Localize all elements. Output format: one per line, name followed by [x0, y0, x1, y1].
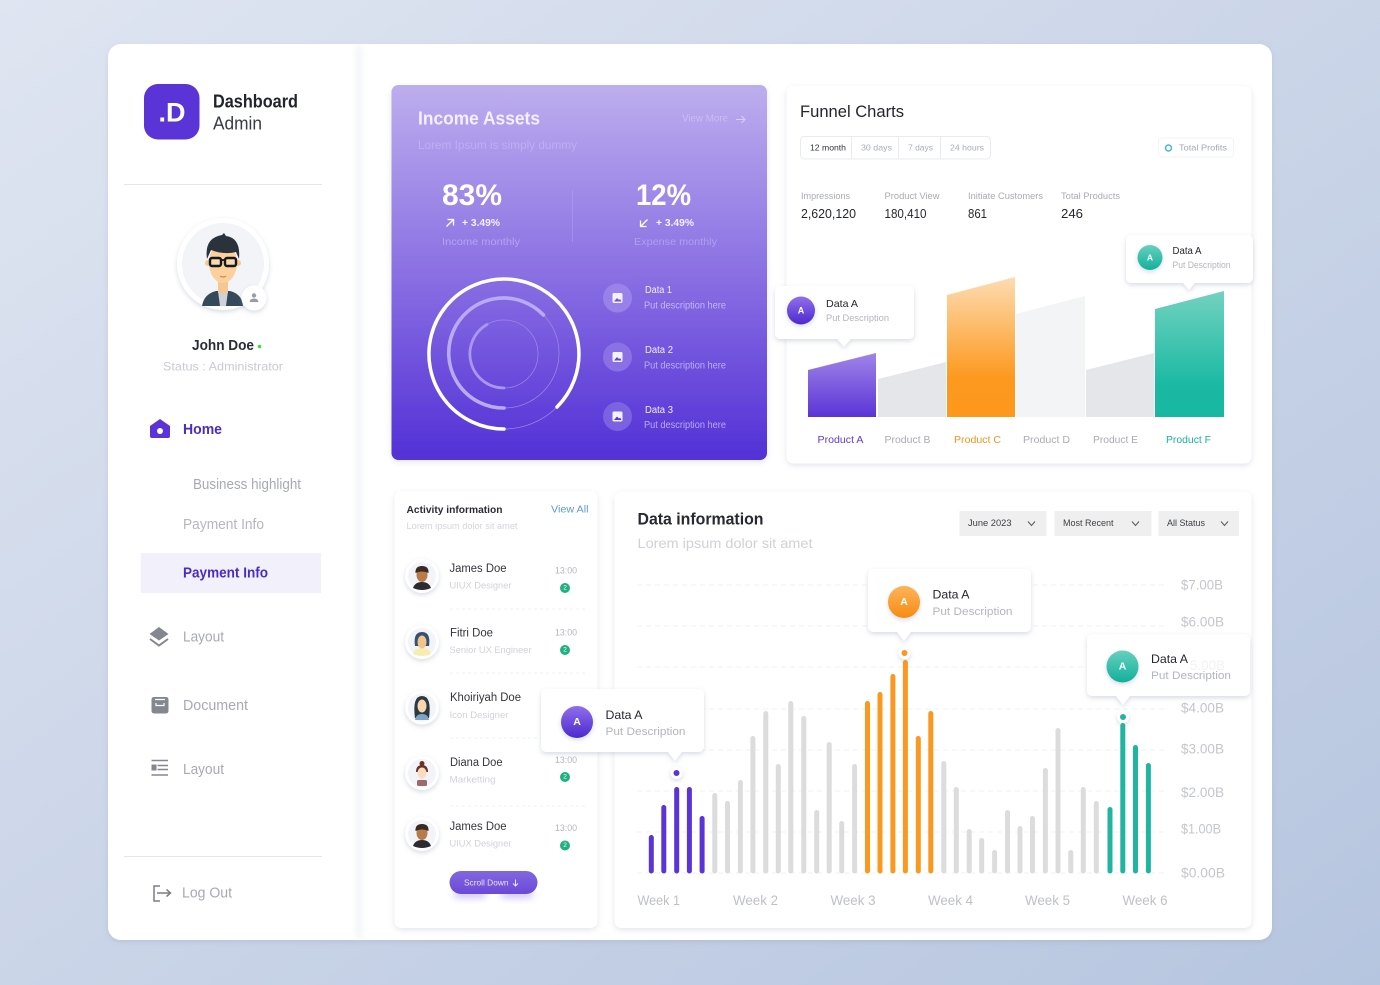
panel: funnel charts: [775, 86, 1253, 464]
log out: [154, 886, 232, 902]
range tabs: 24 hours: [950, 142, 984, 152]
dropdown: status: [1158, 511, 1239, 536]
legend: data 1: [603, 284, 726, 312]
legend: data 1: Put description here: [644, 300, 726, 312]
bars: gray group one: [715, 704, 855, 871]
nav: layout: [150, 627, 224, 646]
brand name: Admin: [213, 114, 262, 134]
bars: gray group two: [944, 730, 1096, 871]
week labels: Week 4: [928, 892, 973, 908]
chart tooltip: teal: Put Description: [1151, 670, 1231, 682]
chart tooltip: purple: Data A: [606, 708, 642, 722]
radial chart: [429, 279, 579, 429]
range tabs: 12 month: [810, 142, 846, 152]
stat: product view: [884, 191, 940, 221]
nav: document: Document: [183, 698, 248, 714]
chart tooltip: teal: A: [1119, 660, 1127, 672]
stat: initiate customers: 861: [968, 206, 987, 221]
stat: income monthly: + 3.49%: [462, 217, 501, 229]
logo: [144, 84, 200, 140]
week labels: Week 3: [830, 892, 876, 908]
nav: payment info active: Payment Info: [183, 566, 268, 582]
nav: payment info: Payment Info: [183, 517, 264, 533]
stat: income monthly: 83%: [442, 179, 502, 212]
y axis labels: $0.00B: [1181, 864, 1225, 880]
y axis labels: $1.00B: [1181, 820, 1221, 836]
total profits legend: [1158, 138, 1234, 157]
week labels: [638, 892, 1168, 908]
user name: John Doe: [192, 338, 254, 354]
stat: impressions: 2,620,120: [801, 206, 856, 221]
bars: teal group: [1110, 726, 1148, 871]
funnel tooltip: teal: A: [1147, 252, 1153, 262]
range tabs: 30 days: [861, 142, 892, 152]
chart tooltip: purple: [541, 689, 704, 761]
sidebar: [124, 46, 362, 938]
bar chart: [651, 662, 1148, 871]
legend: data 2: Data 2: [645, 345, 673, 356]
view more link: View More: [682, 114, 728, 124]
activity row: Diana Doe: [405, 755, 577, 790]
activity row: Fitri Doe: [405, 625, 577, 659]
activity row: James Doe 2: UIUX Designer: [450, 838, 512, 850]
legend: data 2: [603, 342, 726, 372]
dropdown: month: June 2023: [968, 518, 1012, 529]
chart tooltip: orange: [868, 569, 1031, 641]
product labels: Product B: [884, 434, 930, 446]
stat: total products: 246: [1061, 206, 1083, 221]
brand name: [213, 92, 298, 134]
range tabs: 7 days: [908, 142, 933, 152]
activity row: Diana Doe: Marketting: [450, 774, 496, 786]
dropdown: status: All Status: [1167, 518, 1205, 529]
nav: home: Home: [183, 422, 222, 438]
stat: expense monthly: [634, 179, 718, 248]
product labels: [818, 434, 1211, 446]
view all link: View All: [551, 504, 588, 516]
scroll down button: [450, 871, 538, 897]
legend: data 3: Data 3: [645, 405, 673, 416]
nav: layout 2: [152, 760, 224, 778]
scroll down button: Scroll Down: [464, 878, 509, 888]
activity row: Fitri Doe: 13:00: [555, 628, 577, 638]
chart tooltip: teal: Data A: [1151, 652, 1188, 666]
funnel tooltip: teal: Data A: [1172, 246, 1202, 257]
y axis labels: $6.00B: [1181, 614, 1224, 630]
panel: income assets: [392, 85, 767, 460]
brand name: Dashboard: [213, 92, 298, 112]
total profits legend: Total Profits: [1179, 142, 1227, 152]
nav: document: [152, 697, 248, 714]
chart tooltip: purple: Put Description: [606, 726, 686, 738]
week labels: Week 1: [638, 892, 680, 908]
y axis labels: [1181, 576, 1225, 880]
activity heading: Lorem ipsum dolor sit amet: [406, 521, 518, 531]
activity row: Khoiriyah Doe: Icon Designer: [450, 710, 508, 721]
product labels: Product A: [818, 434, 864, 446]
activity row: Khoiriyah Doe: 13:00: [555, 690, 577, 700]
stat: product view: Product View: [884, 191, 940, 201]
funnel tooltip: purple: Put Description: [826, 313, 889, 324]
activity row: Diana Doe: Diana Doe: [450, 757, 502, 769]
range tabs: [800, 136, 990, 159]
product labels: Product F: [1166, 434, 1211, 446]
stat: expense monthly: Expense monthly: [634, 236, 718, 248]
nav: payment info active: [141, 553, 321, 593]
marker: purple: [670, 767, 682, 779]
bars: purple group: [651, 790, 702, 871]
week labels: Week 6: [1122, 892, 1168, 908]
chart tooltip: purple: A: [573, 716, 581, 728]
activity row: Fitri Doe: Senior UX Engineer: [450, 645, 532, 656]
activity row: James Doe 2: [405, 817, 577, 851]
stat: total products: [1061, 191, 1121, 221]
activity row: Diana Doe: 2: [563, 774, 567, 780]
data heading: Lorem ipsum dolor sit amet: [638, 535, 813, 551]
funnel chart: [808, 277, 1224, 417]
stat: income monthly: Income monthly: [442, 236, 521, 248]
y axis labels: $2.00B: [1181, 784, 1224, 800]
product labels: Product E: [1093, 434, 1138, 446]
activity row: Fitri Doe: Fitri Doe: [450, 628, 493, 640]
nav: layout: Layout: [183, 630, 224, 646]
data heading: Data information: [638, 510, 764, 528]
activity row: James Doe 2: James Doe: [450, 821, 506, 833]
stat: expense monthly: 12%: [636, 179, 691, 212]
chart tooltip: teal: [1087, 634, 1250, 705]
activity heading: Activity information: [406, 504, 502, 516]
nav: home: [150, 419, 222, 438]
panel: data information: [541, 492, 1252, 928]
legend: data 2: Put description here: [644, 360, 726, 372]
stat: initiate customers: Initiate Customers: [968, 191, 1044, 201]
stat: income monthly: [442, 179, 521, 248]
user status: Status : Administrator: [163, 360, 283, 374]
legend: data 3: Put description here: [644, 420, 726, 431]
funnel title: Funnel Charts: [800, 102, 904, 121]
log out: Log Out: [182, 886, 232, 902]
chart tooltip: orange: Put Description: [932, 606, 1012, 618]
legend: data 3: [603, 402, 726, 431]
chart tooltip: teal: 5.00B: [1190, 657, 1225, 673]
activity row: James Doe: [405, 559, 577, 593]
activity row: Khoiriyah Doe: [405, 690, 577, 724]
product labels: Product D: [1023, 434, 1070, 446]
funnel tooltip: purple: A: [798, 306, 805, 316]
activity row: Diana Doe: 13:00: [555, 755, 577, 765]
legend: data 1: Data 1: [645, 285, 672, 296]
week labels: Week 2: [733, 892, 778, 908]
stat: impressions: [801, 191, 856, 221]
activity row: James Doe: 13:00: [555, 566, 577, 576]
income title: Income Assets: [418, 108, 540, 128]
y axis labels: $7.00B: [1181, 576, 1223, 592]
activity row: James Doe: 2: [563, 584, 567, 592]
activity row: James Doe: James Doe: [450, 563, 506, 575]
funnel tooltip: purple: Data A: [826, 298, 858, 310]
y axis labels: $3.00B: [1181, 740, 1224, 756]
stat: product view: 180,410: [884, 206, 926, 221]
stat: total products: Total Products: [1061, 191, 1121, 201]
logo: .D: [158, 98, 186, 128]
chart tooltip: orange: A: [900, 596, 908, 608]
marker: teal: [1117, 711, 1129, 723]
main dashboard card: [108, 44, 1272, 940]
activity row: James Doe 2: 13:00: [555, 823, 577, 833]
bars: orange group: [868, 662, 931, 871]
activity row: James Doe: UIUX Designer: [450, 580, 512, 592]
week labels: Week 5: [1025, 892, 1070, 908]
nav: layout 2: Layout: [183, 762, 224, 778]
data heading: [638, 510, 813, 551]
chart tooltip: orange: Data A: [932, 588, 970, 602]
dropdown: sort: Most Recent: [1063, 518, 1114, 529]
profile badge: [242, 286, 266, 310]
y axis labels: $4.00B: [1181, 700, 1224, 716]
income subtitle: Lorem Ipsum is simply dummy: [418, 138, 577, 152]
activity heading: [406, 504, 518, 531]
dropdown: month: [960, 511, 1046, 536]
activity row: Khoiriyah Doe: Khoiriyah Doe: [450, 692, 521, 704]
activity row: Fitri Doe: 2: [563, 646, 567, 654]
dropdown: sort: [1054, 511, 1152, 536]
stat: initiate customers: [968, 191, 1044, 221]
activity row: James Doe 2: 2: [563, 842, 567, 849]
funnel tooltip: teal: [1126, 235, 1253, 290]
marker: orange: [898, 647, 910, 659]
product labels: Product C: [954, 434, 1001, 446]
funnel tooltip: teal: Put Description: [1172, 260, 1230, 270]
stat: expense monthly: + 3.49%: [656, 217, 695, 229]
funnel tooltip: purple: [775, 286, 914, 347]
nav: business highlight: Business highlight: [193, 477, 301, 493]
panel: activity information: [394, 491, 598, 928]
stat: impressions: Impressions: [801, 191, 851, 201]
profile avatar: [177, 218, 269, 310]
